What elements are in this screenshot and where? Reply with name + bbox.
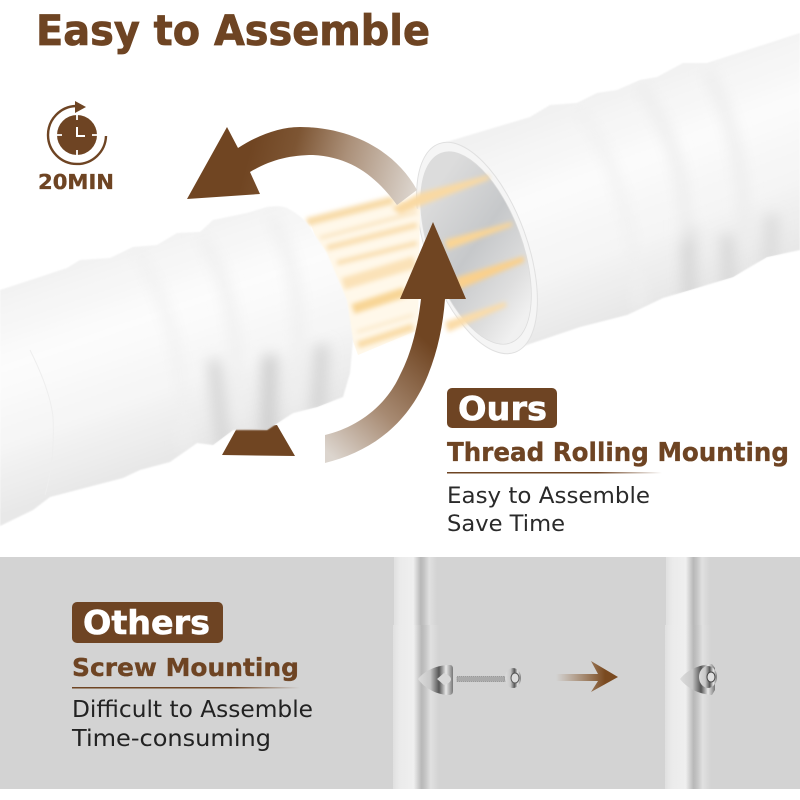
small arrowhead behind left pipe <box>222 425 295 456</box>
panel: others <box>0 557 800 789</box>
pole: left <box>393 557 439 789</box>
curved arrow: upper <box>187 127 417 205</box>
text: others drawbacks: Time-consuming <box>71 726 271 752</box>
icon: 20 minute clock <box>38 101 114 194</box>
icon: 20 minute clock: 20MIN <box>38 170 114 194</box>
heading: screw mounting: Screw Mounting <box>72 653 299 682</box>
right pipe <box>416 34 800 354</box>
light rays <box>307 175 524 355</box>
text: others drawbacks <box>71 697 313 752</box>
text: ours benefits <box>447 484 650 537</box>
text: ours benefits: Easy to Assemble <box>447 484 650 509</box>
left pipe <box>0 206 353 526</box>
icon: screw parts <box>418 665 521 695</box>
heading: thread rolling mounting: Thread Rolling Mounting <box>447 438 789 468</box>
icon: assembled screw <box>680 664 717 695</box>
panel: ours <box>447 388 789 537</box>
badge: others: Others <box>83 603 210 642</box>
curved arrow: lower <box>325 222 466 463</box>
arrow: assembly direction <box>556 661 618 692</box>
pole: right <box>665 557 711 789</box>
text: others drawbacks: Difficult to Assemble <box>72 697 313 723</box>
badge: ours: Ours <box>458 389 547 428</box>
text: ours benefits: Save Time <box>447 512 565 537</box>
title: Easy to Assemble <box>36 6 430 55</box>
